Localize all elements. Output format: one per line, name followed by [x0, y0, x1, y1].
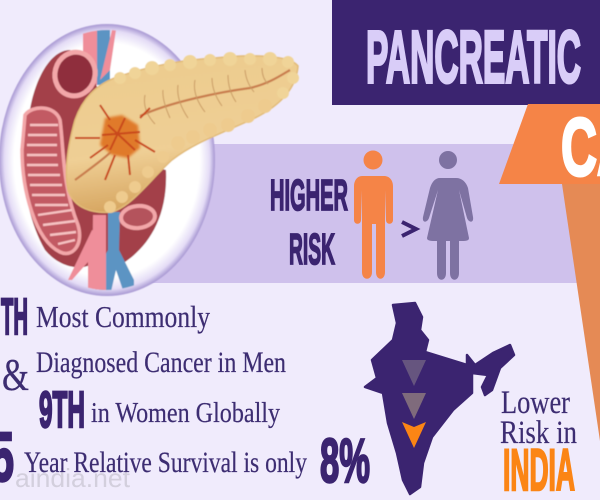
- kidney-like organ: [22, 108, 80, 253]
- pancreas lobules: [114, 52, 299, 99]
- text block: incidence ranking: 9TH: [39, 381, 85, 438]
- lower lobules: [104, 99, 272, 213]
- text block: incidence ranking: Most Commonly: [36, 299, 210, 334]
- watermark: aindia.net: [15, 463, 131, 493]
- pancreatic duct: [75, 70, 290, 180]
- text block: survival: [0, 418, 370, 496]
- heading: higher risk: RISK: [289, 225, 335, 274]
- panel: higher risk band: [150, 144, 580, 283]
- arrow: orange: [402, 422, 426, 448]
- heading: higher risk: [270, 171, 348, 274]
- arrow: top: [402, 360, 426, 386]
- infographic canvas: HIGHER: [270, 171, 348, 220]
- text block: incidence ranking: Diagnosed Cancer in Men: [36, 346, 286, 379]
- arrow: middle: [402, 393, 426, 419]
- icon: man: [354, 150, 393, 279]
- text block: incidence ranking: in Women Globally: [91, 397, 280, 429]
- panel: orange cancer ribbon: [499, 102, 600, 193]
- lower vessel ring: [120, 205, 156, 229]
- greater-than symbol: [402, 222, 416, 236]
- text block: survival: 8%: [320, 427, 370, 496]
- pancreas body: [66, 56, 298, 212]
- duct branches: [144, 68, 268, 124]
- map: India with arrows: [365, 303, 514, 494]
- text block: lower risk in India: [500, 385, 577, 500]
- illustration: pancreas with tumour in circle: [0, 24, 299, 296]
- panel: title banner: [332, 0, 600, 105]
- text block: lower risk in India: Risk in: [500, 415, 577, 451]
- text block: survival: Year Relative Survival is only: [24, 446, 307, 479]
- orange ribbon tail: [562, 184, 600, 441]
- text block: incidence ranking: [1, 288, 286, 438]
- vessel ring: [50, 48, 100, 100]
- text block: incidence ranking: TH: [1, 288, 28, 345]
- text block: incidence ranking: &: [2, 349, 29, 400]
- text block: lower risk in India: Lower: [501, 385, 570, 421]
- icon: woman: [423, 151, 473, 280]
- tumour: [75, 105, 155, 180]
